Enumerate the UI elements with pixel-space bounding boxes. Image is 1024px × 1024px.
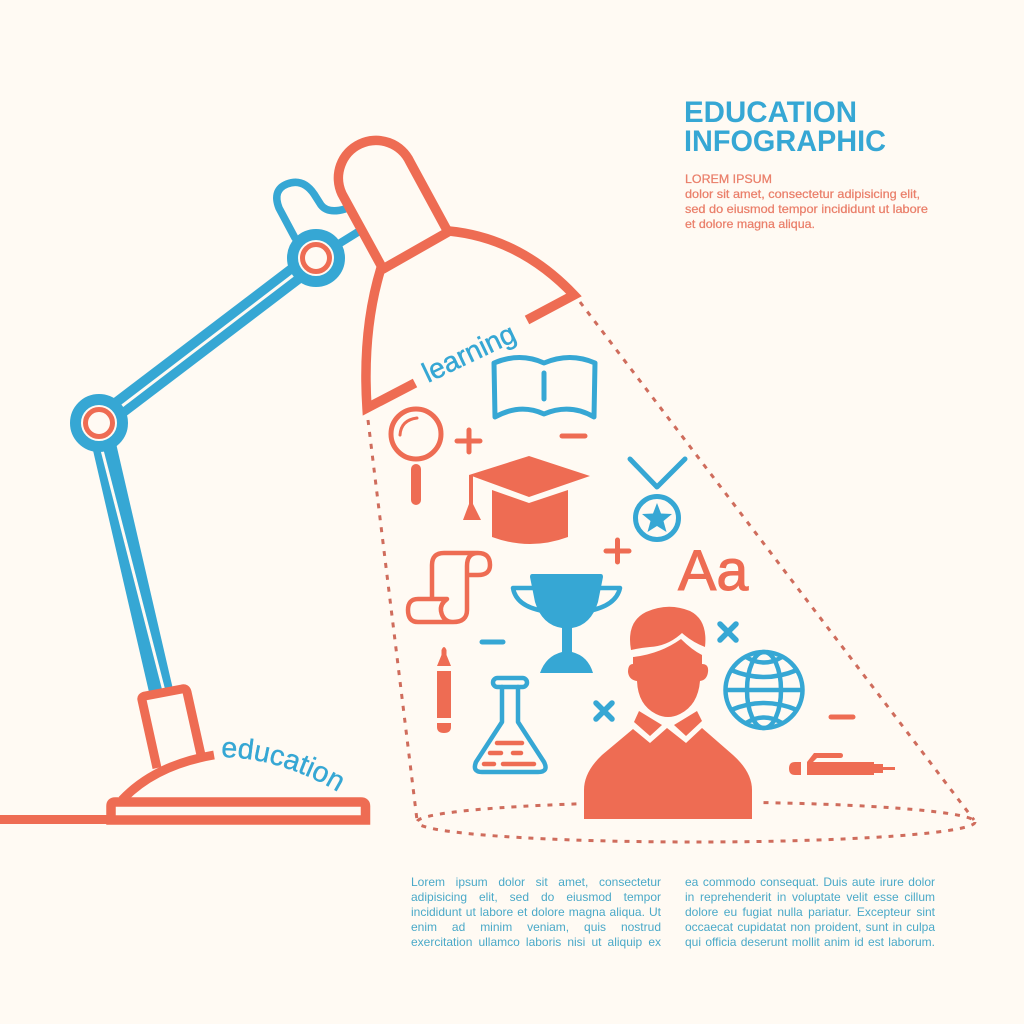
label: learning: learning	[417, 318, 521, 388]
title	[684, 96, 886, 158]
lower arm	[99, 423, 165, 695]
icon: person	[584, 607, 752, 819]
lamp neck	[142, 689, 201, 768]
plus sign	[606, 540, 629, 562]
icon: magnifying glass	[391, 409, 441, 500]
icon: pen	[789, 753, 895, 775]
intro text: LOREM IPSUM	[685, 172, 772, 186]
face	[628, 639, 708, 717]
intro text: dolor sit amet, consectetur adipisicing elit,	[685, 187, 920, 201]
lamp shade	[366, 231, 574, 408]
icon: letters Aa: Aa	[678, 539, 748, 603]
body text: right column: ea commodo consequat. Duis aute irure dolor	[685, 875, 935, 889]
body text: left column: adipisicing elit, sed do eiusmod tempor	[411, 890, 661, 904]
body text: left column: incididunt ut labore et dolore magna aliqua. Ut	[411, 905, 661, 919]
lamp handle	[277, 182, 345, 238]
lamp	[0, 140, 574, 820]
body text: right column: qui officia deserunt mollit anim id est laborum.	[685, 935, 935, 949]
body text: left column: enim ad minim veniam, quis nostrud	[411, 920, 661, 934]
icon: pencil	[437, 647, 451, 733]
icon: trophy	[513, 574, 620, 673]
icon: flask	[475, 678, 546, 772]
light cone dashed outline	[368, 302, 975, 842]
icon: scroll	[408, 553, 490, 622]
minus sign	[562, 434, 585, 438]
body text: left column: Lorem ipsum dolor sit amet, consectetur	[411, 875, 661, 889]
collar	[634, 711, 702, 736]
title: INFOGRAPHIC	[684, 125, 886, 158]
label: education: education	[222, 738, 343, 792]
multiply sign	[720, 624, 736, 640]
minus sign	[482, 640, 503, 644]
intro text: et dolore magna aliqua.	[685, 217, 815, 231]
body text: left column	[411, 875, 661, 949]
intro text: sed do eiusmod tempor incididunt ut labore	[685, 202, 928, 216]
intro text	[685, 172, 928, 231]
icon: open book	[494, 358, 595, 417]
icon: graduation cap	[463, 456, 590, 544]
body text: right column: dolore eu fugiat nulla pariatur. Excepteur sint	[685, 905, 935, 919]
torso	[584, 728, 752, 819]
body text: left column: exercitation ullamco laboris nisi ut aliquip ex	[411, 935, 661, 949]
cutout behind person	[578, 795, 760, 819]
upper arm	[99, 232, 358, 423]
lamp hood	[338, 140, 448, 269]
body text: right column	[685, 875, 936, 949]
hair	[630, 607, 705, 650]
icon: medal	[630, 459, 685, 540]
title: EDUCATION	[684, 96, 857, 129]
lamp base platform	[111, 802, 366, 820]
icon: globe	[726, 652, 802, 728]
ground line	[0, 815, 112, 824]
plus sign	[457, 430, 480, 452]
upper joint	[292, 234, 340, 282]
multiply sign	[596, 703, 612, 719]
body text: right column: in reprehenderit in voluptate velit esse cillum	[685, 890, 935, 904]
lamp base dome	[122, 755, 214, 800]
body text: right column: occaecat cupidatat non proident, sunt in culpa	[685, 920, 935, 934]
lower joint	[76, 400, 122, 446]
minus sign	[831, 714, 853, 720]
